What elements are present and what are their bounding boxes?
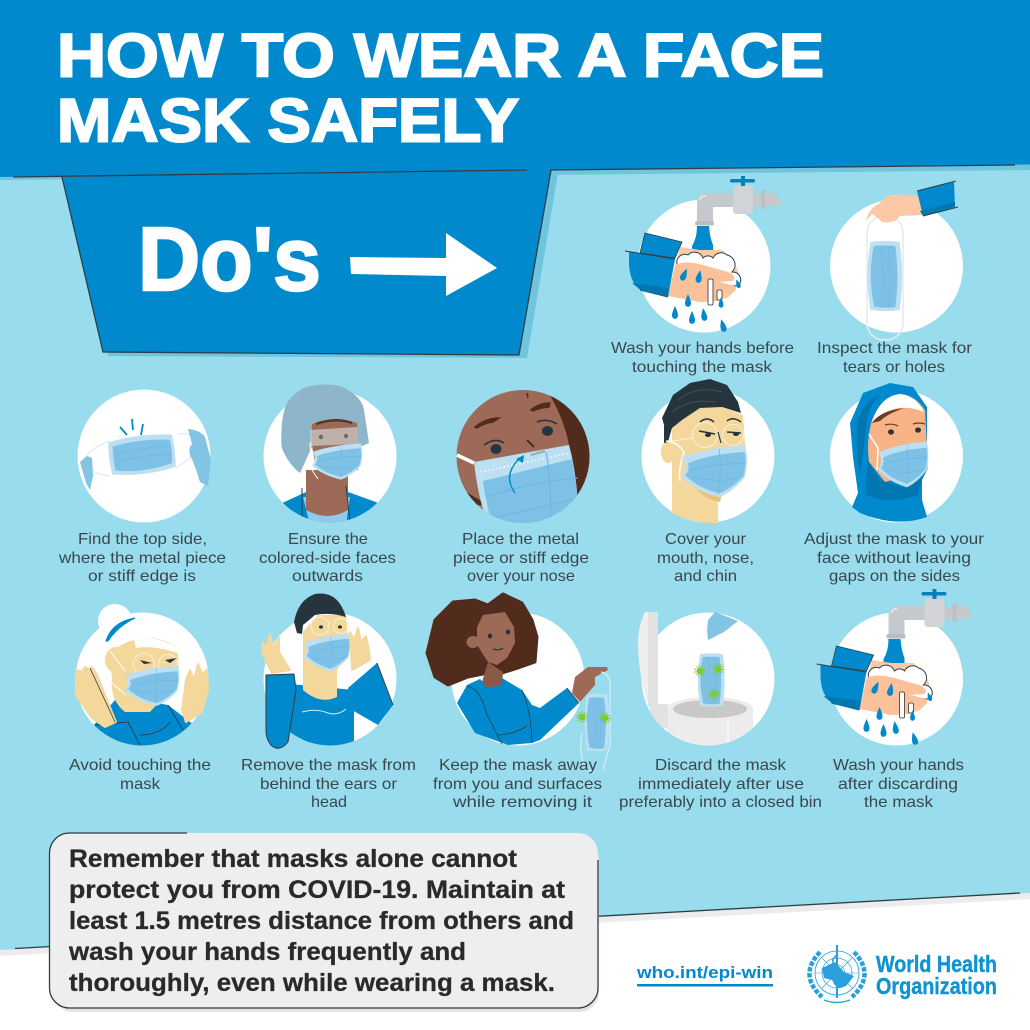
caption: preferably into a closed bin	[619, 794, 822, 811]
step: place metal piece over nose	[450, 390, 600, 585]
icon: close-up face with mask	[456, 390, 590, 523]
callout text: least 1.5 metres distance from others and	[69, 907, 574, 935]
caption	[241, 757, 416, 811]
caption: Cover your	[665, 531, 747, 548]
caption: piece or stiff edge	[453, 550, 589, 567]
caption	[817, 340, 973, 376]
icon: WHO emblem	[809, 945, 865, 1002]
caption: over your nose	[467, 568, 575, 585]
icon: man removing mask	[262, 593, 396, 750]
caption	[453, 531, 589, 585]
caption: Keep the mask away	[439, 757, 597, 774]
icon: older woman with hands raised	[76, 604, 208, 750]
icon: man with glasses and mask	[642, 379, 774, 523]
arrow	[350, 233, 497, 296]
caption	[58, 531, 226, 585]
header banner	[0, 0, 1030, 177]
icon: woman in headscarf with mask	[830, 383, 963, 522]
title: MASK SAFELY	[57, 86, 519, 154]
panel: Do's banner	[13, 165, 1015, 358]
wordmark: World Health	[876, 951, 997, 977]
icon: washing hands	[625, 176, 781, 332]
caption: Inspect the mask for	[817, 340, 973, 357]
title	[57, 21, 824, 154]
caption: and chin	[674, 568, 737, 585]
step: keep the mask away	[427, 594, 610, 811]
callout text	[68, 845, 574, 997]
step: inspect the mask	[817, 181, 973, 376]
caption	[433, 757, 602, 811]
caption: colored-side faces	[259, 550, 396, 567]
footer white band	[0, 893, 1030, 1030]
caption: after discarding	[838, 776, 958, 793]
caption: Ensure the	[288, 531, 368, 548]
caption: gaps on the sides	[829, 568, 960, 585]
caption	[619, 757, 822, 811]
callout text: protect you from COVID-19. Maintain at	[69, 876, 566, 904]
caption: mouth, nose,	[657, 550, 754, 567]
callout: reminder	[50, 833, 599, 1012]
caption: behind the ears or	[260, 776, 398, 793]
caption: touching the mask	[632, 359, 773, 376]
caption: from you and surfaces	[433, 776, 602, 793]
caption	[69, 757, 211, 793]
caption	[833, 757, 964, 811]
wordmark	[876, 951, 997, 999]
step: remove the mask	[241, 593, 416, 811]
icon: washing hands	[816, 589, 972, 746]
step: adjust the mask	[804, 383, 985, 585]
caption: Find the top side,	[78, 531, 207, 548]
caption: Adjust the mask to your	[804, 531, 985, 548]
caption: Discard the mask	[655, 757, 787, 774]
caption: face without leaving	[817, 550, 971, 567]
caption: head	[311, 794, 347, 811]
link: who.int/epi-win: who.int/epi-win	[636, 963, 773, 982]
caption	[657, 531, 754, 585]
header shadow	[0, 164, 1030, 180]
caption: the mask	[864, 794, 934, 811]
icon: mask dropped into bin	[638, 612, 774, 748]
icon: nurse with face shield	[264, 385, 396, 530]
caption: where the metal piece	[58, 550, 226, 567]
caption: Avoid touching the	[69, 757, 211, 774]
step: find the top side	[58, 390, 226, 585]
step: discard the mask	[619, 612, 822, 811]
caption	[804, 531, 985, 585]
caption: immediately after use	[638, 776, 804, 793]
heading: Do's: Do's	[138, 210, 321, 310]
step: wash hands before	[611, 176, 794, 376]
caption: Place the metal	[462, 531, 579, 548]
caption: Wash your hands before	[611, 340, 794, 357]
icon: hand holding mask	[830, 181, 963, 340]
step: colored side outwards	[259, 385, 396, 585]
caption: or stiff edge is	[88, 568, 196, 585]
title: HOW TO WEAR A FACE	[57, 21, 824, 89]
callout text: Remember that masks alone cannot	[69, 845, 518, 873]
wordmark: Organization	[876, 973, 997, 999]
caption: Remove the mask from	[241, 757, 416, 774]
icon: gloved hands holding mask	[78, 390, 211, 522]
caption: outwards	[292, 568, 363, 585]
callout text: wash your hands frequently and	[68, 938, 466, 966]
caption: mask	[120, 776, 161, 793]
step: cover mouth, nose, chin	[642, 379, 774, 585]
caption: tears or holes	[843, 359, 945, 376]
caption	[611, 340, 794, 376]
caption: while removing it	[452, 794, 593, 811]
icon: woman holding mask away	[427, 594, 610, 772]
step: wash hands after	[816, 589, 972, 811]
logo: World Health Organization	[809, 945, 997, 1002]
callout text: thoroughly, even while wearing a mask.	[69, 969, 555, 997]
caption	[259, 531, 396, 585]
step: avoid touching the mask	[69, 604, 211, 793]
caption: Wash your hands	[833, 757, 964, 774]
